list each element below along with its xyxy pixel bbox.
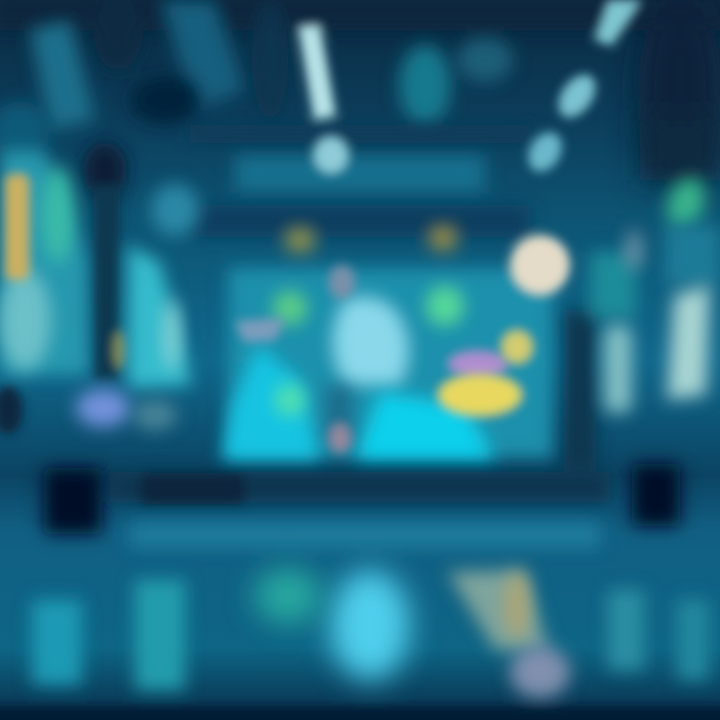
figure: pink head xyxy=(329,265,355,299)
column: dark xyxy=(94,185,120,380)
reflection: orange xyxy=(448,570,548,650)
shape: lilac left xyxy=(235,318,285,342)
figure: pale blue orb xyxy=(332,297,409,385)
ceiling structure xyxy=(0,0,720,237)
shape: cream disc xyxy=(510,235,570,295)
lamp: left orange xyxy=(286,228,314,252)
panel: yellow strip xyxy=(5,174,29,280)
reflection: left teal xyxy=(135,580,185,690)
panel: bright cyan xyxy=(128,245,192,388)
light: central lower xyxy=(313,136,349,174)
band: dark left block xyxy=(140,474,245,504)
reflection: right teal xyxy=(608,590,644,670)
object: dark left edge xyxy=(0,386,23,434)
shape: green left xyxy=(273,291,307,325)
object: grey shape xyxy=(133,400,177,430)
light: right strip middle xyxy=(551,68,603,124)
panel: teal wall xyxy=(0,150,88,375)
stage: backdrop xyxy=(228,268,553,458)
band: floor shadow xyxy=(110,472,610,502)
panel: pale wash xyxy=(0,270,51,370)
reflection: far left teal xyxy=(32,600,82,685)
object: purple glow xyxy=(76,389,130,427)
shape: green glow xyxy=(275,384,305,416)
figure: dark silhouette xyxy=(564,310,596,470)
figure: pink foot xyxy=(329,423,351,453)
shape: purple cap xyxy=(448,351,508,377)
light: right strip top xyxy=(594,0,642,46)
speaker: left xyxy=(44,468,102,534)
shape: cyan mound left xyxy=(222,345,320,460)
panel: blue wash xyxy=(665,225,720,285)
panel: pale streak xyxy=(163,299,181,371)
reflection: yellow strip xyxy=(505,571,529,639)
shape: cyan mound right xyxy=(355,392,495,460)
lamp: right orange xyxy=(430,226,456,250)
panel: green accent xyxy=(660,172,712,234)
shape: yellow mound xyxy=(438,374,522,416)
speaker: right xyxy=(632,464,680,526)
light: right strip lower xyxy=(522,126,568,178)
accent: orange column spot xyxy=(112,330,126,370)
right panels xyxy=(590,110,720,413)
light: central strip xyxy=(298,24,336,120)
reflection: central cyan xyxy=(330,570,410,680)
panel: green accent xyxy=(42,167,74,263)
floor reflections xyxy=(0,568,720,720)
panel: dark right wall xyxy=(640,110,720,180)
panel: teal block xyxy=(590,252,636,318)
reflection: green xyxy=(254,568,322,624)
left panels xyxy=(0,150,192,434)
ceiling lights xyxy=(298,0,642,178)
shape: green right xyxy=(426,286,464,326)
floor: bottom edge xyxy=(0,708,720,720)
panel: pink spot xyxy=(625,230,643,270)
panel: pale strip right xyxy=(667,285,710,400)
reflection: far right teal xyxy=(677,600,709,680)
panel: pale strip left xyxy=(604,325,632,413)
band: light step xyxy=(130,522,600,548)
dark band xyxy=(44,464,680,548)
reflection: lilac xyxy=(510,646,570,698)
figure: dark legs xyxy=(326,385,352,445)
shape: yellow ball xyxy=(501,330,533,364)
central stage xyxy=(222,226,596,470)
